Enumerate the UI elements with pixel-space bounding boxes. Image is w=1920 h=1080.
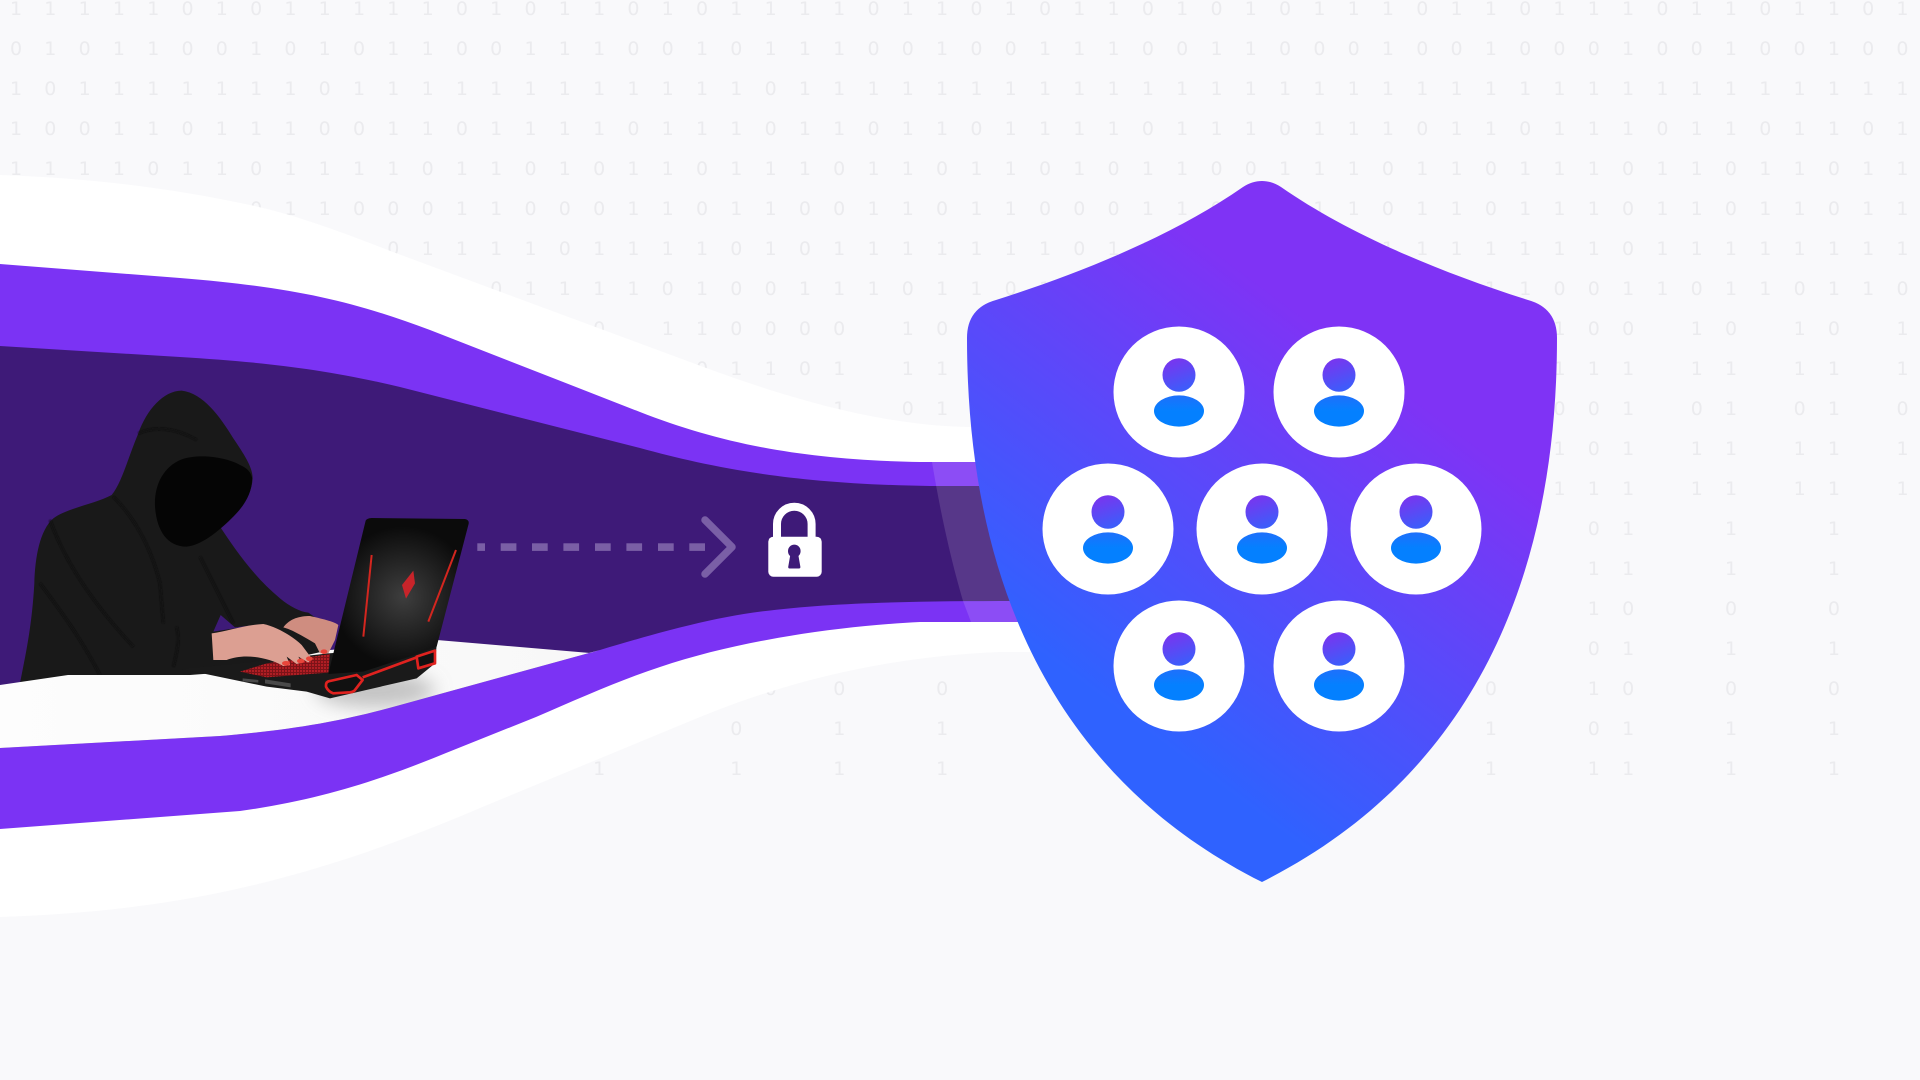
binary digits pattern: 11 (1691, 358, 1759, 380)
binary digits pattern: 11 (799, 398, 868, 420)
hood opening, dark face (155, 456, 252, 547)
gap between arms (213, 615, 258, 632)
binary digits pattern: 0 (1485, 678, 1519, 700)
binary digits pattern: 10 (1794, 318, 1862, 340)
binary digits pattern: 1 (833, 718, 868, 740)
binary digits pattern: 1 (1485, 758, 1519, 780)
translucent shield glow (932, 462, 1040, 622)
binary digits pattern: 0 (765, 678, 799, 700)
binary digits pattern: 01011001010110011100101110010011100110001001000100100100 (10, 38, 1920, 60)
binary digits pattern: 1 (1828, 718, 1862, 740)
binary digits pattern: 11 (1691, 478, 1759, 500)
laptop lid (328, 518, 469, 674)
white outer wave (0, 175, 1030, 917)
binary digits pattern: 10111111101111111111110111111111111111111111111111111111 (10, 78, 1920, 100)
binary digits pattern: 10 (902, 318, 970, 340)
binary digits pattern: 11111110110001100011011001101100011011110110111011011011 (10, 198, 1920, 220)
user badge 7 (1274, 600, 1404, 732)
far hand (283, 616, 338, 653)
binary digits pattern: 0 (1828, 678, 1862, 700)
binary digits pattern: 1 (936, 718, 970, 740)
user badge 1 (1114, 326, 1244, 458)
binary digits pattern: 10 (1691, 318, 1759, 340)
red keyboard (240, 654, 330, 677)
binary digits pattern: 0 (1828, 598, 1862, 620)
user badge 2 (1274, 326, 1404, 458)
binary digits pattern: 11 (1588, 758, 1656, 780)
white desk (0, 640, 600, 748)
binary digits pattern: 1 (833, 758, 868, 780)
binary digits pattern: 01 (1794, 398, 1862, 420)
binary digits pattern: 0 (936, 678, 970, 700)
binary digits pattern: 01 (1691, 398, 1759, 420)
binary digits pattern: 01111010011101101 (490, 278, 1073, 300)
dashed arrow (477, 520, 732, 574)
binary digits pattern: 0 (833, 678, 868, 700)
user badge 3 (1042, 464, 1174, 594)
binary digits pattern: 01101 (696, 358, 868, 380)
binary digits pattern: 11 (1691, 438, 1759, 460)
purple wave band (0, 264, 1030, 829)
binary digits pattern: 111 (1554, 358, 1656, 380)
binary digits pattern: 1 (1828, 758, 1862, 780)
binary digits pattern: 10 (1588, 598, 1656, 620)
user badge 5 (1350, 464, 1482, 594)
binary digits pattern: 1 (1828, 558, 1862, 580)
laptop ports (243, 678, 291, 687)
binary digits pattern: 110000 (662, 318, 867, 340)
binary digits pattern: 0 (1725, 678, 1759, 700)
binary digits pattern: 1 (1485, 718, 1519, 740)
binary digits pattern: 1 (936, 758, 970, 780)
binary digits pattern: 1 (593, 758, 627, 780)
binary digits pattern: 100 (1554, 318, 1656, 340)
binary digits pattern: 1 (1725, 558, 1759, 580)
binary digits pattern: 01 (1588, 518, 1656, 540)
dark purple inner channel (0, 346, 1030, 748)
binary digits pattern: 101 (1554, 438, 1656, 460)
binary digits pattern: 01 (902, 398, 970, 420)
binary digits pattern: 001 (1554, 398, 1656, 420)
user badge 6 (1114, 600, 1244, 732)
binary digits pattern: 0 (593, 318, 627, 340)
binary digits pattern: 11 (1794, 478, 1862, 500)
binary digits pattern: 1 (1828, 638, 1862, 660)
binary digits pattern: 1 (1725, 518, 1759, 540)
binary digits pattern: 0 (730, 718, 765, 740)
user badge 4 (1196, 464, 1328, 594)
hands and laptop (182, 518, 469, 698)
binary digits pattern (10, 0, 1920, 780)
binary digits pattern: 10 (1588, 678, 1656, 700)
binary digits pattern: 1 (1725, 718, 1759, 740)
binary digits pattern: 11 (1794, 358, 1862, 380)
binary digits pattern: 11 (902, 358, 970, 380)
binary digits pattern: 1 (1828, 518, 1862, 540)
near hand (212, 624, 327, 666)
binary digits pattern: 11111111111011110111101011111110111111111111111011111111 (10, 238, 1920, 260)
shield (967, 181, 1557, 882)
binary digits pattern: 11110110111101101011011101101101011001110110111011011011 (10, 158, 1920, 180)
hoodie figure (18, 391, 333, 692)
binary digits pattern: 1100110110110 (1485, 278, 1920, 300)
binary digits pattern: 1 (1725, 758, 1759, 780)
hoodie body (18, 391, 333, 692)
icon: padlock (768, 507, 822, 577)
binary digits pattern: 01 (1588, 638, 1656, 660)
binary digits pattern: 0 (1725, 598, 1759, 620)
red laptop trim (326, 651, 435, 693)
binary digits pattern: 11 (1794, 438, 1862, 460)
binary digits pattern: 01 (1588, 718, 1656, 740)
binary digits pattern: 111 (1554, 478, 1656, 500)
binary digits pattern: 11 (1588, 558, 1656, 580)
binary digits pattern: 1 (1725, 638, 1759, 660)
laptop base (182, 645, 437, 698)
binary digits pattern: 10011011100110111101110110110111101110111011011101101101 (10, 118, 1920, 140)
binary digits pattern: 1 (730, 758, 765, 780)
